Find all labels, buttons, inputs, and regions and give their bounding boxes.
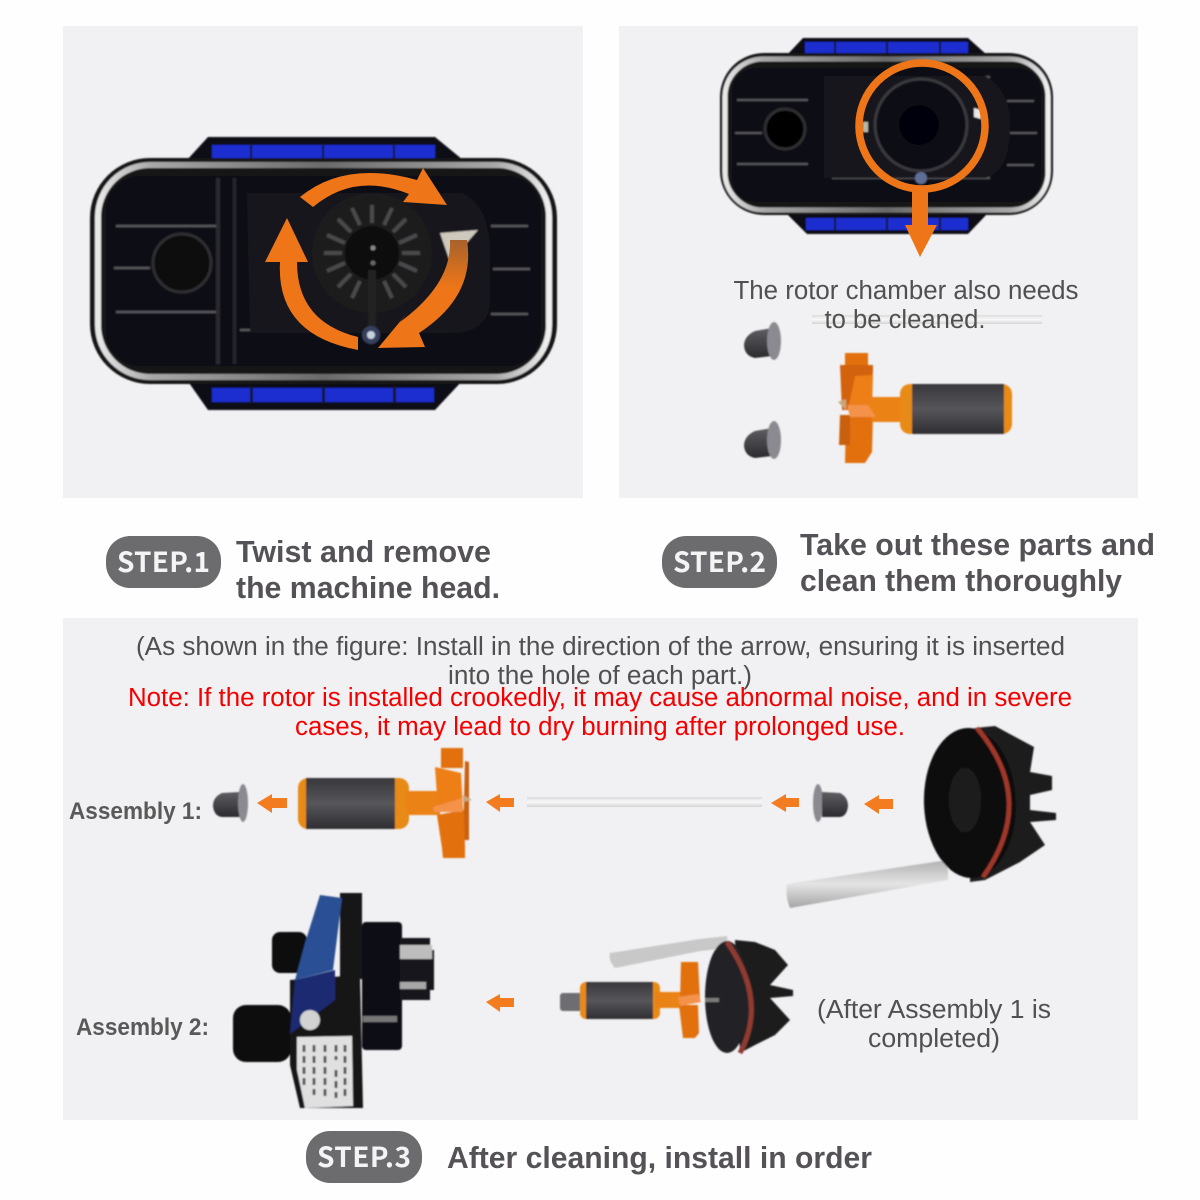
icon: rotor assembly 1: [298, 748, 472, 858]
panel: step 2 photo: [619, 26, 1138, 498]
badge: step 2: STEP.2: [673, 541, 766, 581]
badge: step 1: STEP.1: [117, 541, 210, 581]
text: install instructions: (As shown in the figure: Install in the direction of the arrow, ensuring it is inserted: [136, 633, 1065, 661]
arrow: assembly 2: [486, 994, 514, 1012]
icon: machine head, rotor visible: [90, 137, 557, 410]
icon: assembled rotor and cover: [560, 936, 793, 1053]
heading: step 1: Twist and remove: [236, 534, 491, 569]
icon: rubber cap top: [744, 322, 781, 360]
text: after assembly 1 note: (After Assembly 1 is: [817, 996, 1051, 1024]
panel: step 1 photo: [63, 26, 583, 498]
arrow: assembly 1 a: [257, 794, 287, 813]
text: install instructions: into the hole of each part.): [448, 662, 752, 690]
heading: step 2: clean them thoroughly: [800, 563, 1123, 598]
text: rotor chamber note line 2: to be cleaned.: [824, 306, 986, 334]
badge: step 3: [306, 1131, 422, 1183]
arrow: right rotation: [378, 240, 468, 348]
arrow: downward: [905, 187, 937, 257]
icon: rubber cap left: [213, 784, 248, 822]
heading: step 3: After cleaning, install in order: [447, 1140, 872, 1175]
text: rotor chamber note: The rotor chamber also needs: [734, 277, 1078, 305]
badge: step 2: [662, 536, 777, 588]
arrow: top rotation: [300, 168, 447, 207]
icon: machine head, rotor chamber: [720, 38, 1053, 234]
icon: shaft: [527, 797, 762, 807]
text: red warning note: Note: If the rotor is installed crookedly, it may cause abnormal noise, and in severe: [128, 684, 1072, 712]
panel: step 3 assembly: [63, 618, 1138, 1120]
arrow: assembly 1 d: [864, 795, 893, 814]
text: red warning note: cases, it may lead to dry burning after prolonged use.: [295, 713, 905, 741]
icon: rubber cap right: [813, 784, 848, 822]
arrow: assembly 1 c: [771, 794, 799, 812]
heading: step 2: Take out these parts and: [800, 527, 1155, 562]
heading: step 1: the machine head.: [236, 570, 500, 605]
callout: orange ring: [859, 63, 985, 189]
badge: step 1: [106, 536, 221, 588]
arrow: assembly 1 b: [486, 794, 514, 812]
icon: pump body: [233, 893, 434, 1108]
badge: step 3: STEP.3: [317, 1136, 411, 1176]
arrow: left rotation: [265, 218, 358, 350]
icon: rubber cap bottom: [744, 421, 781, 459]
text: after assembly 1 note: completed): [868, 1025, 1000, 1053]
icon: white rod: [812, 315, 1042, 324]
label: assembly 2: Assembly 2:: [76, 1014, 209, 1041]
icon: impeller cover with tube: [786, 726, 1056, 908]
label: assembly 1: Assembly 1:: [69, 798, 202, 825]
icon: rotor: [838, 353, 1012, 463]
